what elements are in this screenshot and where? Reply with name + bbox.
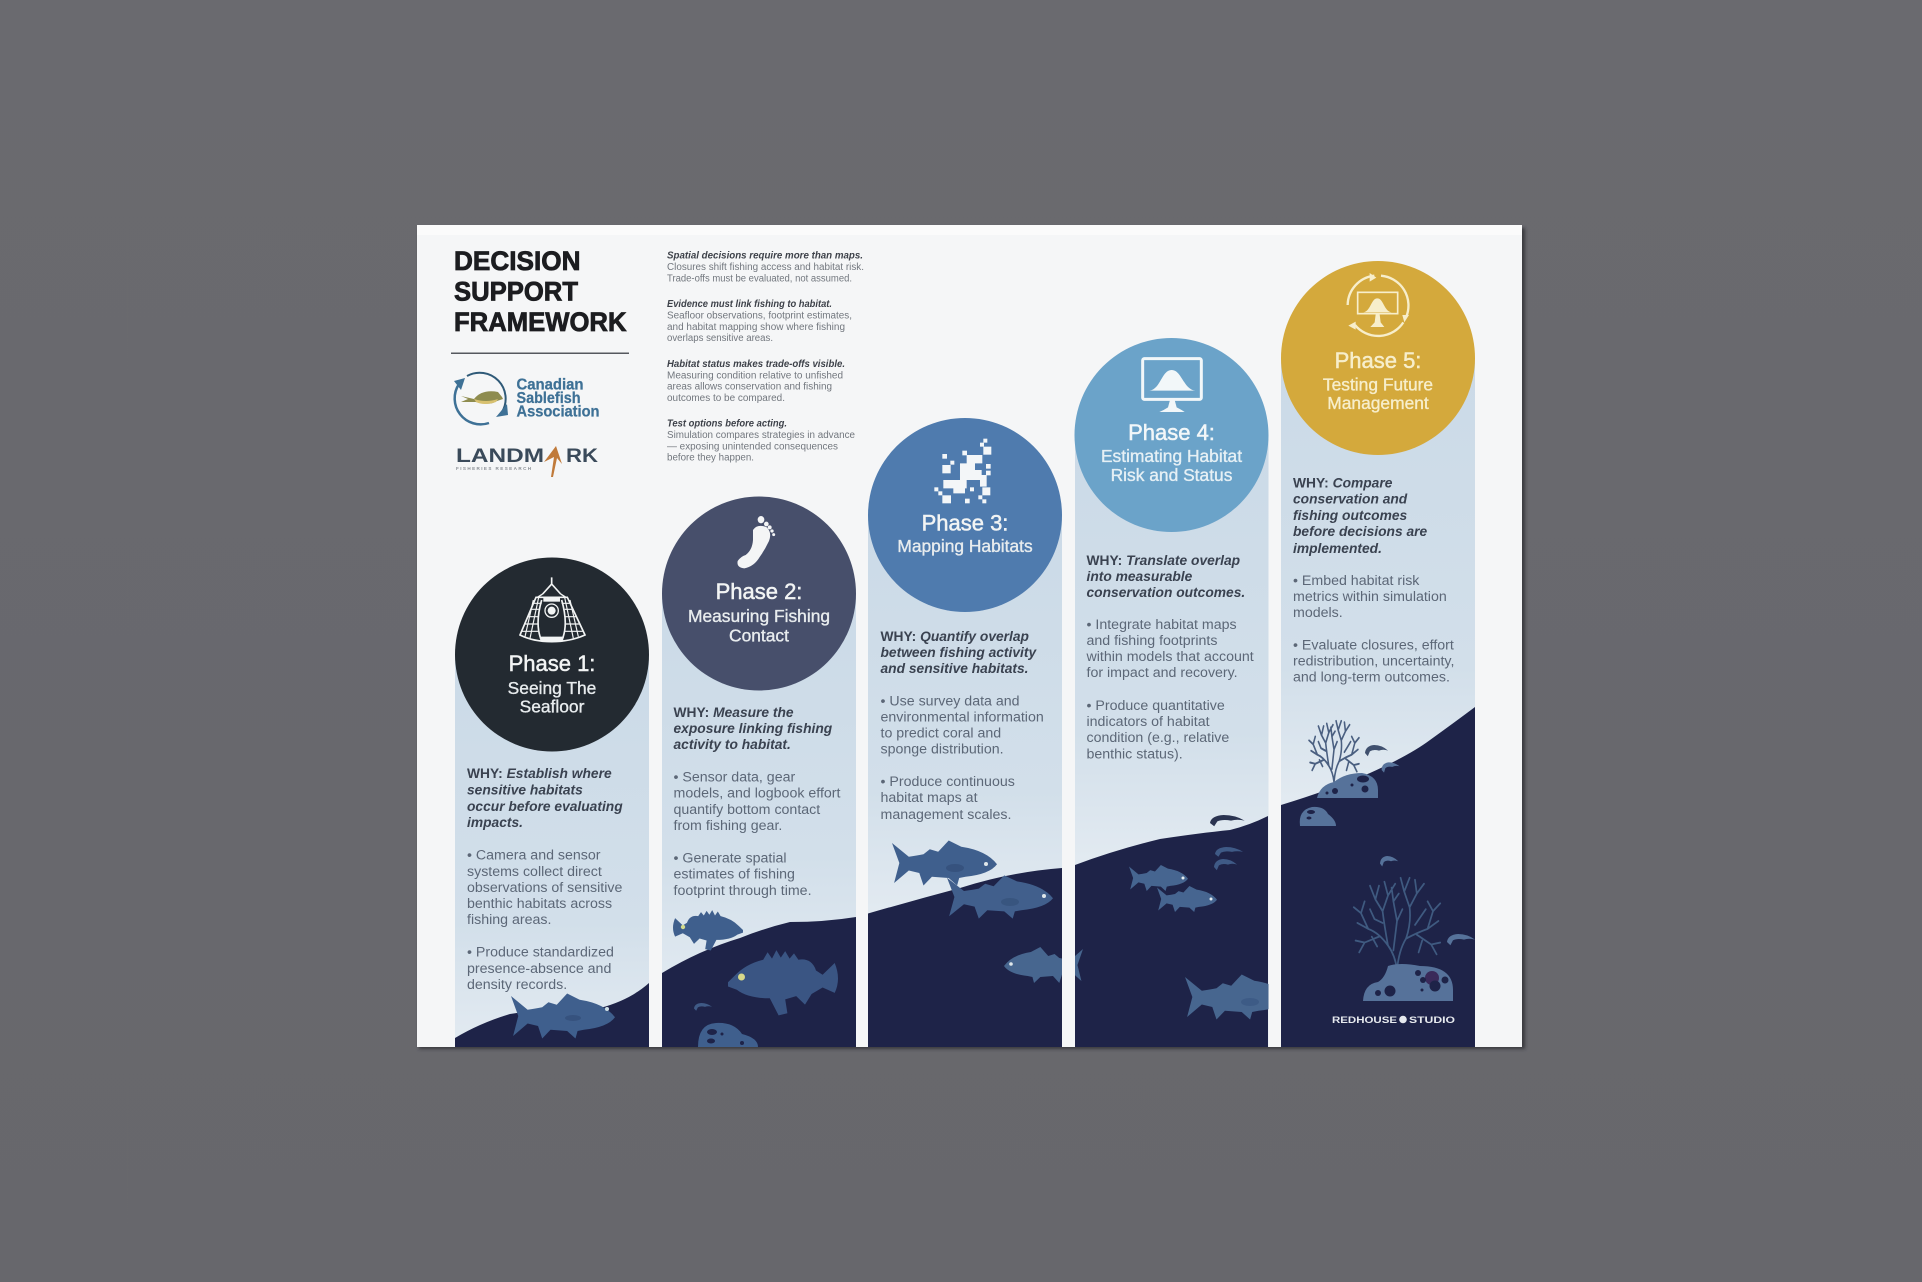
circle 2 [662,496,856,690]
phase 2 bullets: • Generate spatial [674,850,787,866]
phase 5 bullets: metrics within simulation [1293,589,1447,605]
icon: monitor with bell curve [1143,359,1201,412]
note 4: — exposing unintended consequences [667,442,838,452]
studio credit: STUDIO [1409,1015,1455,1026]
phase 2 bullets: models, and logbook effort [674,786,841,802]
panel: Phase 2 [662,496,856,1047]
phase 2 why: WHY: Measure the [674,705,794,720]
phase 1 why [467,766,623,830]
studio credit [1332,1015,1455,1026]
phase 3 why [880,629,1037,676]
seafloor 2 [662,917,856,1047]
landmark letters: LANDM [456,445,544,467]
phase 5 bullets: models. [1293,605,1343,621]
phase 1 subtitle [508,678,596,716]
phase 4 bullets: within models that account [1086,649,1254,665]
column 5 background [1281,358,1475,1047]
icon: pixel habitat map [934,439,991,503]
note 3: Habitat status makes trade-offs visible. [667,359,845,370]
note 3: areas allows conservation and fishing [667,382,832,392]
phase 4 bullets: • Produce quantitative [1086,698,1225,714]
phase 4 heading: Phase 4: [1128,420,1215,445]
phase 3 bullets: sponge distribution. [880,742,1004,758]
note 2: and habitat mapping show where fishing [667,322,845,333]
phase 5 bullets: • Embed habitat risk [1293,573,1420,589]
phase 1 bullets: observations of sensitive [467,880,622,896]
phase 4 subtitle: Estimating Habitat [1101,446,1242,466]
note 1: Trade-offs must be evaluated, not assumed. [667,274,852,284]
phase 5 why: WHY: Compare [1293,476,1393,490]
phase 2 subtitle: Contact [729,626,789,646]
logo mark: cycle arrows and fish [454,373,508,424]
fish: bass 2 [947,875,1053,919]
note 2 [667,299,852,344]
landmark orange arrow [544,446,562,477]
note 1: Spatial decisions require more than maps. [667,250,863,262]
phase 2 bullets [674,770,841,899]
title divider [451,352,629,354]
logo: Landmark [456,445,598,477]
coral large [1354,878,1440,970]
phase 1 bullets: density records. [467,977,567,993]
seafloor 3 [868,868,1062,1047]
phase 1 bullets: • Produce standardized [467,944,614,960]
note 1 [667,250,864,284]
panel: Phase 4 [1074,338,1268,1047]
fish: bass 3 [1004,947,1062,983]
shrimp near coral [1365,745,1388,756]
phase 3 bullets: • Produce continuous [880,774,1015,790]
column 4 background [1075,435,1268,1047]
seafloor 4 [1075,816,1268,1047]
note 2: Seafloor observations, footprint estimates, [667,310,852,322]
panel: Phase 3 [868,418,1083,1047]
phase 4 why: WHY: Translate overlap [1086,553,1240,568]
phase 2 why: exposure linking fishing [674,721,833,736]
phase 2 subtitle: Measuring Fishing [688,606,830,626]
phase 2 bullets: quantify bottom contact [674,802,820,818]
title: DECISION [454,246,580,276]
rock 2 [698,1023,758,1047]
note 1: Closures shift fishing access and habitat risk. [667,262,864,273]
phase 4 bullets: for impact and recovery. [1086,665,1238,681]
paper shadow [419,228,1525,1049]
phase 2 bullets: • Sensor data, gear [674,770,795,786]
fish: bass 1 [892,840,997,886]
note 2: overlaps sensitive areas. [667,333,773,344]
phase 5 subtitle: Management [1327,393,1429,413]
shrimp on slope [1381,761,1400,773]
coral small [1309,721,1359,782]
phase 3 bullets: • Use survey data and [880,694,1020,710]
phase 1 heading: Phase 1: [509,651,595,676]
shrimp right edge [1447,934,1475,945]
seafloor 5 [1281,707,1475,1047]
shrimp 2 [694,1003,712,1011]
note 4: before they happen. [667,452,754,464]
phase 4 bullets: condition (e.g., relative [1086,730,1229,746]
phase 5 subtitle: Testing Future [1323,374,1433,394]
phase 4 bullets [1086,617,1254,762]
phase 5 why: implemented. [1293,541,1382,556]
phase 5 bullets: and long-term outcomes. [1293,670,1450,686]
fish: tail from column 3 [1075,949,1083,981]
fish: small rockfish [673,910,743,950]
title [454,246,627,337]
rock with holes, small [1317,773,1378,798]
phase 1 why: sensitive habitats [467,782,583,798]
phase 4 bullets: and fishing footprints [1086,633,1217,649]
phase 1 bullets: • Camera and sensor [467,848,601,864]
phase 4 why: into measurable [1086,569,1193,584]
phase 3 subtitle: Mapping Habitats [897,536,1033,556]
shrimps in sea [1214,847,1243,870]
note 3: Measuring condition relative to unfished [667,370,843,382]
phase 5 why: before decisions are [1293,524,1428,539]
logo: Canadian Sablefish Association [454,373,600,424]
phase 2 why [674,705,833,752]
phase 5 subtitle [1323,374,1433,413]
logo wordmark: Canadian [516,376,584,394]
shrimp deep [1380,856,1398,866]
phase 4 bullets: • Integrate habitat maps [1086,617,1237,633]
column 3 background [868,515,1062,1047]
note 4: Simulation compares strategies in advance [667,430,855,441]
fish: salmon 1 [511,994,615,1038]
seafloor 1 [455,983,649,1047]
note 4 [667,418,855,464]
icon: footprint [737,516,775,568]
rock large with holes [1363,964,1453,1001]
circle 1 [455,558,649,752]
intro notes [667,250,864,464]
fish: shoal 2 [1157,886,1217,912]
phase 5 bullets [1293,573,1454,686]
landmark tagline: FISHERIES RESEARCH [456,466,533,471]
phase 2 heading: Phase 2: [716,579,802,604]
circle 5 [1281,261,1475,455]
paper sheet [417,225,1522,1047]
phase 5 why: fishing outcomes [1293,508,1408,523]
phase 1 why: WHY: Establish where [467,766,612,781]
rock 2 col 5 [1300,807,1336,826]
phase 4 subtitle [1101,446,1242,485]
title: FRAMEWORK [454,307,627,337]
fish: shoal 1 [1129,865,1188,891]
phase 3 heading: Phase 3: [922,510,1008,536]
note 3: outcomes to be compared. [667,393,785,404]
phase 1 bullets: benthic habitats across [467,896,612,912]
phase 4 bullets: benthic status). [1086,746,1183,762]
phase 1 bullets [467,848,622,993]
phase 3 bullets [880,694,1044,823]
column 1 background [455,654,649,1047]
phase 1 bullets: fishing areas. [467,912,551,928]
phase 3 bullets: management scales. [880,807,1011,823]
logo wordmark: Association [516,404,600,420]
landmark letters [456,445,598,467]
phase 2 why: activity to habitat. [674,737,791,752]
panel: Phase 1 [455,558,649,1047]
phase 5 bullets: • Evaluate closures, effort [1293,638,1454,654]
column 2 background [662,594,856,1047]
phase 2 bullets: footprint through time. [674,883,812,899]
phase 4 bullets: indicators of habitat [1086,714,1210,730]
phase 1 why: occur before evaluating [467,799,623,814]
landmark letters: RK [566,445,598,467]
phase 4 why [1086,553,1245,600]
phase 4 why: conservation outcomes. [1086,585,1245,600]
phase 5 why: conservation and [1293,492,1408,506]
phase 3 bullets: habitat maps at [880,790,978,806]
phase 1 subtitle: Seafloor [520,696,585,716]
phase 3 why: WHY: Quantify overlap [880,629,1029,644]
logo wordmark [516,376,600,420]
phase 5 bullets: redistribution, uncertainty, [1293,654,1454,670]
phase 1 subtitle: Seeing The [508,678,596,698]
phase 5 heading: Phase 5: [1335,348,1421,373]
phase 3 why: and sensitive habitats. [880,661,1028,676]
shrimp on surface [1210,815,1245,826]
title: SUPPORT [454,276,578,306]
studio credit: REDHOUSE [1332,1015,1397,1026]
phase 5 why [1293,476,1428,556]
fish: large salmon [1185,974,1268,1020]
circle 4 [1074,338,1268,532]
phase 3 bullets: environmental information [880,710,1044,726]
icon: simulation monitor with cycle arrows [1348,273,1409,336]
icon: seafloor lander [520,577,585,642]
circle 3 [868,418,1062,612]
phase 1 why: impacts. [467,815,523,830]
note 3 [667,359,845,404]
phase 1 bullets: systems collect direct [467,864,602,880]
note 2: Evidence must link fishing to habitat. [667,299,832,310]
phase 3 why: between fishing activity [880,645,1037,660]
logo wordmark: Sablefish [516,390,580,407]
phase 2 bullets: estimates of fishing [674,866,795,882]
phase 4 subtitle: Risk and Status [1111,465,1233,485]
phase 1 bullets: presence-absence and [467,961,611,977]
phase 3 bullets: to predict coral and [880,726,1001,742]
phase 2 bullets: from fishing gear. [674,818,782,834]
note 4: Test options before acting. [667,418,787,430]
phase 2 subtitle [688,606,830,646]
fish: large rockfish [728,950,838,1015]
panel: Phase 5 [1281,261,1475,1047]
